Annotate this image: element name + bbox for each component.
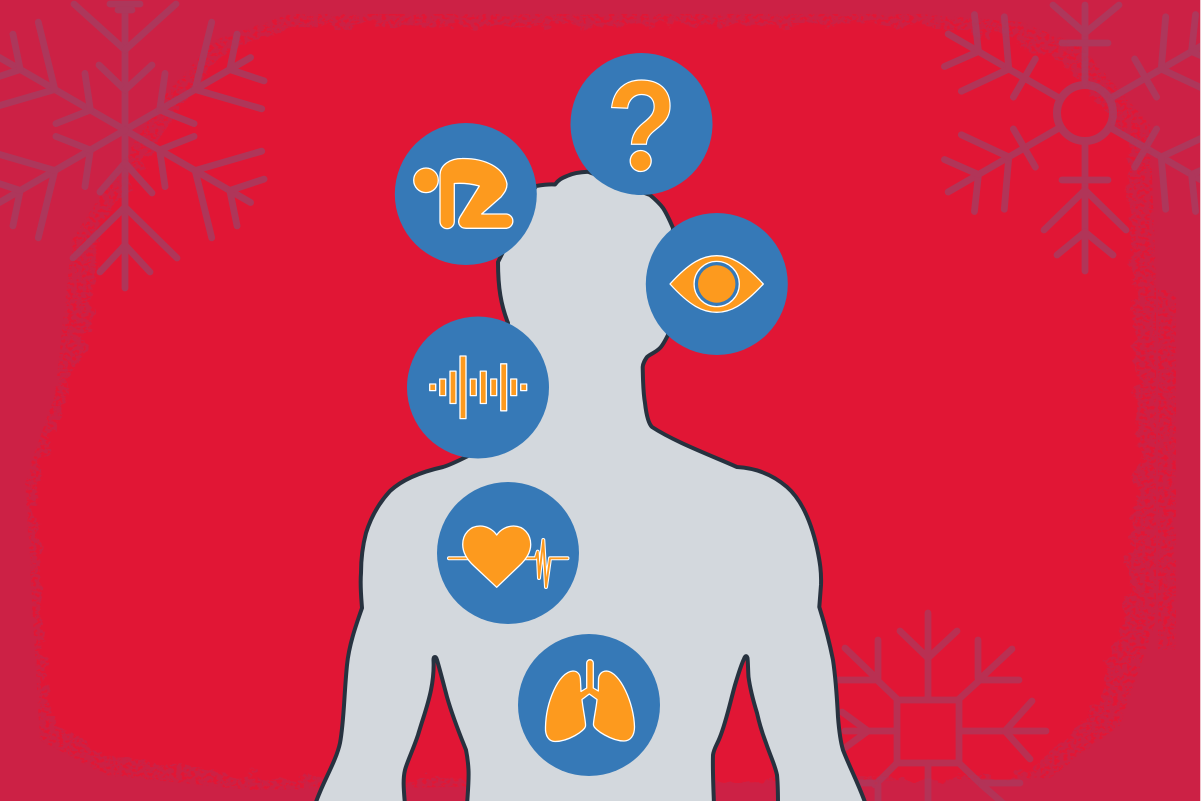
icon: eye bbox=[670, 256, 763, 312]
badge: lungs bbox=[518, 634, 660, 776]
icon: heart with pulse line bbox=[449, 526, 568, 587]
flake ring and arms bbox=[927, 0, 1201, 271]
badge: bent-over person bbox=[395, 123, 537, 265]
human body silhouette bbox=[315, 172, 866, 801]
badge: vision eye bbox=[646, 213, 788, 355]
right edge sliver bbox=[1200, 0, 1201, 801]
flake centre arms bbox=[0, 4, 276, 288]
snowflake: top right bbox=[927, 0, 1201, 271]
badge: heartbeat bbox=[437, 482, 579, 624]
icon: sound wave bars bbox=[430, 356, 527, 419]
snowflake: bottom right bbox=[838, 613, 1046, 801]
icon: person doubled over bbox=[414, 158, 513, 229]
badge: confusion question mark bbox=[570, 53, 712, 200]
background right streak bbox=[1158, 290, 1176, 650]
snowflake: top left bbox=[0, 4, 276, 288]
flake square and arms bbox=[838, 613, 1046, 801]
icon: question mark: ? bbox=[606, 54, 677, 200]
badge: hearing sound wave bbox=[407, 316, 549, 458]
icon: lungs bbox=[545, 660, 634, 742]
